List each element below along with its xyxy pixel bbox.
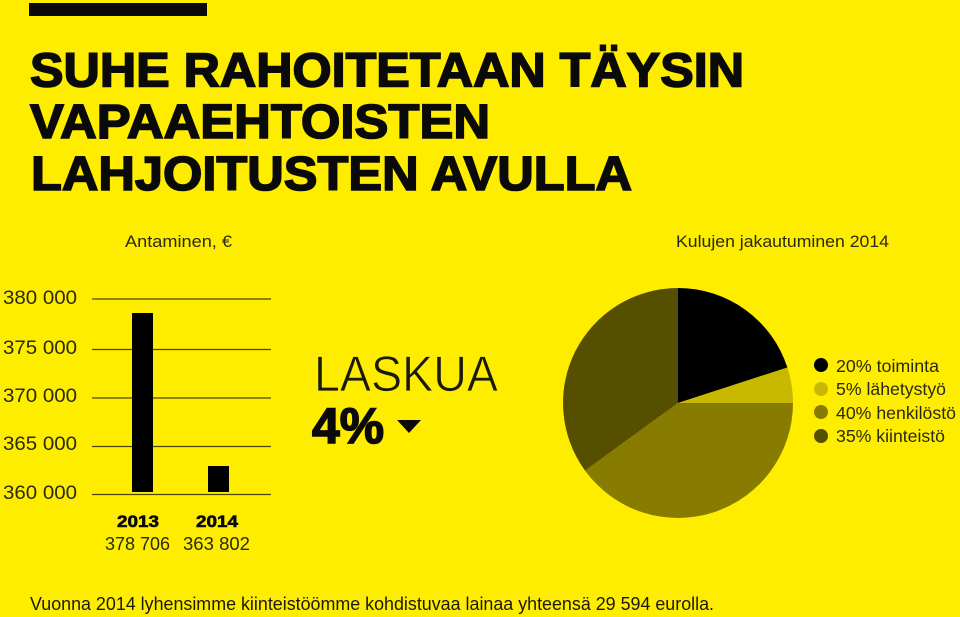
year labels: 2013 <box>117 512 159 531</box>
title <box>30 44 744 201</box>
y axis labels: 380 000 <box>3 287 77 309</box>
icon: down arrow <box>397 420 421 433</box>
bar chart: giving <box>3 287 271 554</box>
y axis labels: 370 000 <box>3 385 77 407</box>
top accent bar <box>29 3 207 16</box>
title: VAPAAEHTOISTEN <box>30 96 490 149</box>
heading: giving: Antaminen, € <box>125 232 233 251</box>
legend: 35% kiinteistö <box>836 426 945 446</box>
y axis labels: 360 000 <box>3 482 77 504</box>
bar 2014 <box>208 466 229 492</box>
bar 2013 <box>132 313 153 492</box>
legend <box>814 356 956 446</box>
legend: 5% lähetystyö <box>836 379 946 399</box>
y axis labels <box>3 287 77 504</box>
y axis labels: 365 000 <box>3 433 77 455</box>
value labels: 378 706 <box>105 534 170 554</box>
year labels <box>117 512 239 531</box>
callout: decrease: 4% <box>312 398 384 454</box>
callout: decrease: LASKUA <box>314 346 499 402</box>
legend: 40% henkilöstö <box>836 403 956 423</box>
legend: 20% toiminta <box>836 356 939 376</box>
callout: decrease <box>312 346 499 454</box>
title: LAHJOITUSTEN AVULLA <box>31 148 632 201</box>
heading: cost breakdown: Kulujen jakautuminen 2014 <box>676 232 889 251</box>
year labels: 2014 <box>196 512 239 531</box>
footnote: Vuonna 2014 lyhensimme kiinteistöömme kohdistuvaa lainaa yhteensä 29 594 eurolla. <box>30 593 714 614</box>
title: SUHE RAHOITETAAN TÄYSIN <box>30 44 744 98</box>
y axis labels: 375 000 <box>3 337 77 359</box>
pie chart <box>563 288 793 518</box>
value labels <box>105 534 250 554</box>
value labels: 363 802 <box>183 534 250 554</box>
